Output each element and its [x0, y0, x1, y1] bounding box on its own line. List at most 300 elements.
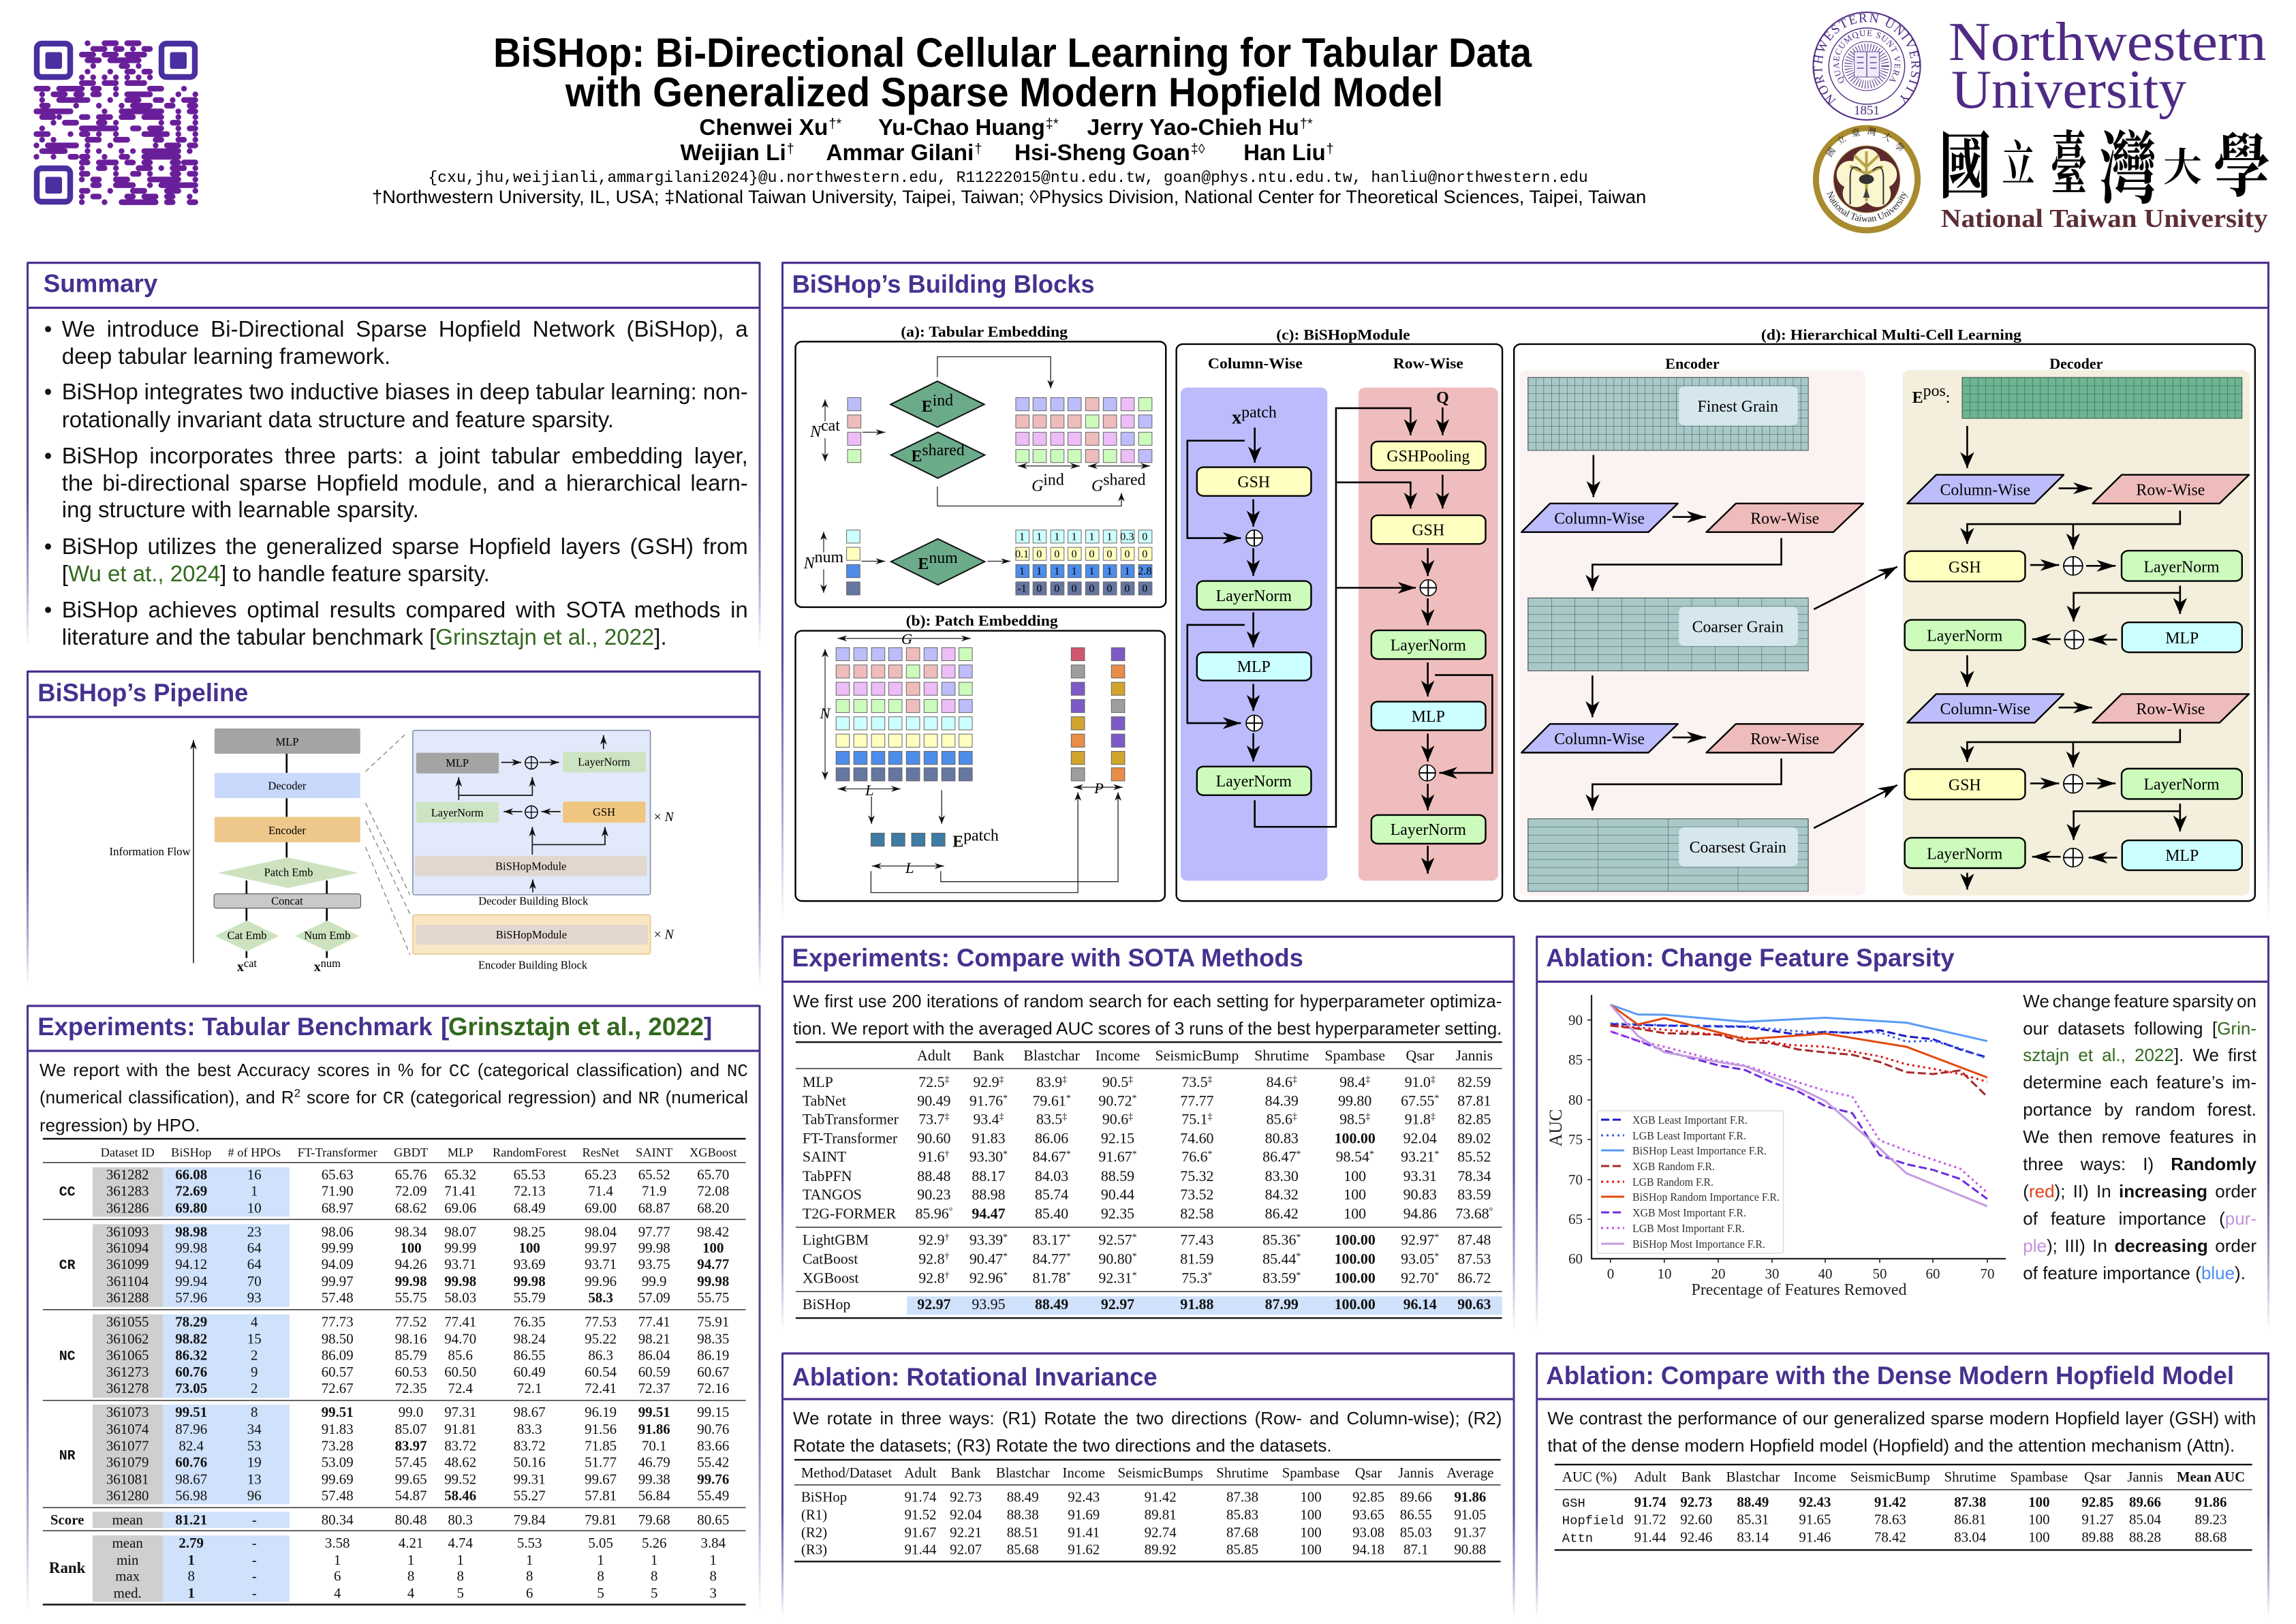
text block: sparsity explanation: We change feature sparsity on — [2023, 991, 2256, 1011]
panel: (d) hierarchical multi-cell learning: Finest Grain — [1698, 398, 1778, 416]
authors: † — [1327, 142, 1334, 157]
table: tabular benchmark: BiSHop — [171, 1146, 211, 1159]
text block: tabular benchmark intro: We report with the best Accuracy scores in % for CC (categorical classification) and NC — [40, 1060, 748, 1082]
logo: Northwestern seal: NORTHWESTERN UNIVERSITY — [1814, 14, 1920, 104]
table: tabular benchmark: 50.16 — [514, 1454, 546, 1471]
table: SOTA comparison: 98.4‡ — [1339, 1074, 1370, 1090]
table: SOTA comparison: 93.39* — [969, 1232, 1008, 1248]
table: SOTA comparison: 85.52 — [1457, 1148, 1491, 1165]
line chart: AUC vs features removed: 90 — [1568, 1012, 1583, 1028]
table: tabular benchmark: 71.85 — [585, 1438, 617, 1454]
panel: (a) tabular embedding: 0 — [1036, 583, 1042, 595]
panel: (a) tabular embedding: 0 — [1124, 583, 1130, 595]
pipeline diagram: Patch Emb — [264, 866, 313, 879]
authors: Hsi-Sheng Goan — [1014, 140, 1190, 165]
table: tabular benchmark: 64 — [247, 1256, 262, 1272]
authors: ‡◊ — [1191, 142, 1205, 157]
panel: (a) tabular embedding: Nnum — [803, 549, 844, 572]
table: tabular benchmark: 54.87 — [395, 1487, 427, 1503]
table: tabular benchmark: FT-Transformer — [298, 1146, 377, 1159]
table: SOTA comparison: 100 — [1344, 1168, 1366, 1184]
table: tabular benchmark: SAINT — [636, 1146, 672, 1159]
table: rotational invariance: 91.86 — [1454, 1489, 1486, 1505]
panel: (a) tabular embedding: 1 — [1036, 566, 1042, 577]
table: tabular benchmark: 83.97 — [395, 1438, 427, 1454]
logo: NTU calligraphy: 國 — [1939, 127, 1991, 208]
table: dense Hopfield comparison: 91.74 — [1634, 1494, 1666, 1510]
table: tabular benchmark: 72.41 — [585, 1380, 617, 1396]
text block: summary bullets — [44, 316, 748, 649]
table: SOTA comparison: 93.31 — [1403, 1168, 1437, 1184]
heading: SOTA: Experiments: Compare with SOTA Methods — [792, 944, 1303, 972]
figure: building blocks a b c — [796, 324, 1502, 901]
table: SOTA comparison: 91.0‡ — [1405, 1074, 1436, 1090]
table: rotational invariance: 100 — [1300, 1541, 1322, 1557]
table: tabular benchmark: 93 — [247, 1289, 262, 1306]
table: rotational invariance: 91.37 — [1454, 1524, 1486, 1540]
table: tabular benchmark: 361286 — [106, 1199, 149, 1216]
heading: summary: Summary — [44, 270, 158, 297]
table: SOTA comparison: 86.42 — [1265, 1206, 1299, 1222]
table: tabular benchmark: 46.79 — [638, 1454, 670, 1471]
table: SOTA comparison: 92.04 — [1403, 1130, 1437, 1146]
table: rotational invariance: 93.65 — [1352, 1507, 1384, 1523]
authors: †* — [828, 117, 841, 132]
table: SOTA comparison: 93.95 — [972, 1296, 1006, 1313]
panel: (a) tabular embedding: 0 — [1054, 583, 1059, 595]
panel: (a) tabular embedding: 0.3 — [1120, 532, 1134, 543]
table: dense Hopfield comparison: Jannis — [2127, 1469, 2163, 1485]
table: rotational invariance: 91.74 — [904, 1489, 937, 1505]
table: tabular benchmark: 94.77 — [697, 1256, 729, 1272]
pipeline diagram: Information Flow — [110, 845, 191, 858]
panel: (d) hierarchical multi-cell learning: LayerNorm — [2143, 558, 2220, 576]
table: SOTA comparison: 91.76* — [969, 1093, 1008, 1109]
table: tabular benchmark: 65.32 — [444, 1167, 476, 1183]
table: rotational invariance: 85.68 — [1007, 1541, 1039, 1557]
panel: building blocks frame — [781, 262, 2269, 920]
panel: (a) tabular embedding: 1 — [1036, 532, 1042, 543]
table: SOTA comparison: 82.59 — [1457, 1074, 1491, 1090]
table: dense Hopfield comparison: Adult — [1634, 1469, 1666, 1485]
panel: (d) hierarchical multi-cell learning: Encoder — [1665, 355, 1720, 372]
panel: (a) tabular embedding: 0 — [1106, 549, 1112, 560]
logo: NTU wordmark: National Taiwan University — [1941, 204, 2268, 233]
heading: tabular benchmark: Grinsztajn et al., 2022 — [448, 1013, 704, 1041]
table: tabular benchmark: 1 — [407, 1552, 414, 1568]
table: tabular benchmark: 361273 — [106, 1364, 149, 1380]
line chart: AUC vs features removed: 85 — [1568, 1052, 1583, 1068]
table: tabular benchmark: 23 — [247, 1223, 262, 1240]
table: rotational invariance: 86.55 — [1400, 1507, 1432, 1523]
table: SOTA comparison: 83.30 — [1265, 1168, 1299, 1184]
table: rotational invariance: (R1) — [801, 1507, 827, 1523]
table: tabular benchmark: 98.21 — [638, 1330, 670, 1347]
table: tabular benchmark: 98.42 — [697, 1223, 729, 1240]
table: SOTA comparison: 86.72 — [1457, 1270, 1491, 1286]
table: tabular benchmark: 361079 — [106, 1454, 149, 1471]
table: SOTA comparison: 73.7‡ — [918, 1112, 949, 1128]
table: rotational invariance: Blastchar — [996, 1465, 1050, 1481]
pipeline diagram: × N — [654, 928, 674, 943]
table: tabular benchmark: 94.12 — [175, 1256, 207, 1272]
table: tabular benchmark: 91.56 — [585, 1421, 617, 1437]
table: SOTA comparison: 82.85 — [1457, 1112, 1491, 1128]
table: tabular benchmark: 90.76 — [697, 1421, 729, 1437]
table: tabular benchmark: 99.98 — [638, 1240, 670, 1256]
table: tabular benchmark: # of HPOs — [228, 1146, 281, 1159]
text block: sparsity explanation: (red); II) In increasing order — [2023, 1181, 2256, 1201]
table: tabular benchmark: 361282 — [106, 1167, 149, 1183]
pipeline diagram: Encoder Building Block — [478, 959, 588, 972]
table: dense Hopfield comparison: 92.46 — [1680, 1529, 1712, 1546]
table: tabular benchmark: 94.26 — [395, 1256, 427, 1272]
table: tabular benchmark: 8 — [651, 1568, 657, 1584]
table: dense Hopfield comparison: 91.27 — [2081, 1512, 2113, 1528]
table: SOTA comparison: 74.60 — [1180, 1130, 1214, 1146]
table: tabular benchmark: - — [252, 1535, 257, 1551]
table: tabular benchmark: 85.79 — [395, 1347, 427, 1363]
table: tabular benchmark: 76.35 — [514, 1314, 546, 1330]
table: rotational invariance: Method/Dataset — [801, 1465, 892, 1481]
table: dense Hopfield comparison: Blastchar — [1726, 1469, 1780, 1485]
table: SOTA comparison: 92.15 — [1101, 1130, 1134, 1146]
table: rotational invariance: 87.68 — [1226, 1524, 1258, 1540]
table: dense Hopfield comparison: 91.42 — [1874, 1494, 1906, 1510]
table: tabular benchmark: 80.65 — [697, 1512, 729, 1528]
table: SOTA comparison: 92.35 — [1101, 1206, 1134, 1222]
table: dense Hopfield comparison: GSH — [1562, 1496, 1585, 1511]
title: with Generalized Sparse Modern Hopfield Model — [565, 70, 1443, 115]
table: dense Hopfield comparison: 88.49 — [1737, 1494, 1769, 1510]
chart legend: BiSHop Most Importance F.R. — [1632, 1238, 1765, 1251]
authors: ‡* — [1046, 117, 1059, 132]
table: tabular benchmark: 98.06 — [322, 1223, 354, 1240]
affiliations: †Northwestern University, IL, USA; ‡National Taiwan University, Taipei, Taiwan; ◊Physics Division, National Center for Theoretical Sciences, Taipei, Taiwan — [372, 187, 1646, 207]
panel: pipeline frame — [27, 671, 760, 986]
table: tabular benchmark: 99.51 — [638, 1404, 670, 1420]
table: tabular benchmark: 34 — [247, 1421, 262, 1437]
text block: SOTA intro: tion. We report with the averaged AUC scores of 3 runs of the best hyperparameter setting. — [793, 1018, 1502, 1039]
table: dense Hopfield comparison: Mean AUC — [2177, 1469, 2245, 1485]
panel: (d) hierarchical multi-cell learning: LayerNorm — [1927, 627, 2003, 645]
table: tabular benchmark: 361099 — [106, 1256, 149, 1272]
table: dense Hopfield comparison: 83.14 — [1737, 1529, 1769, 1546]
table: tabular benchmark: 99.51 — [322, 1404, 354, 1420]
table: rotational invariance: 92.85 — [1352, 1489, 1384, 1505]
panel: (a) tabular embedding: Gshared — [1091, 471, 1146, 495]
table: SOTA comparison: 85.96° — [915, 1206, 952, 1222]
table: rotational invariance: 100 — [1300, 1489, 1322, 1505]
table: SOTA comparison: 100.00 — [1335, 1251, 1376, 1268]
table: tabular benchmark: 1 — [456, 1552, 464, 1568]
table: SOTA comparison: 72.5‡ — [918, 1074, 949, 1090]
table: tabular benchmark: NC — [59, 1348, 76, 1364]
pipeline diagram: GSH — [593, 806, 615, 818]
table: dense Hopfield comparison: Shrutime — [1944, 1469, 1996, 1485]
table: tabular benchmark: 68.87 — [638, 1199, 670, 1216]
table: tabular benchmark: 8 — [251, 1404, 258, 1420]
table: tabular benchmark: 99.51 — [175, 1404, 207, 1420]
text block: sparsity explanation: our datasets following [Grin- — [2023, 1018, 2256, 1039]
university logos — [1812, 12, 2270, 233]
table: tabular benchmark: 55.42 — [697, 1454, 729, 1471]
table: tabular benchmark: 99.9 — [642, 1273, 666, 1289]
table: dense Hopfield comparison: 92.60 — [1680, 1512, 1712, 1528]
table: tabular benchmark: 87.96 — [175, 1421, 207, 1437]
table: tabular benchmark: 98.07 — [444, 1223, 476, 1240]
panel: (b) patch embedding: P — [1093, 780, 1104, 797]
table: tabular benchmark: 4.74 — [448, 1535, 474, 1551]
panel: (a) tabular embedding: Enum — [918, 549, 958, 573]
table: tabular benchmark: 361074 — [106, 1421, 149, 1437]
line chart: AUC vs features removed: 75 — [1568, 1131, 1583, 1148]
QR code — [36, 43, 196, 202]
pipeline diagram — [110, 729, 674, 975]
table: tabular benchmark: 3 — [710, 1585, 717, 1602]
text block: summary bullets: • — [44, 533, 52, 559]
panel: (a) tabular embedding: 1 — [1019, 532, 1025, 543]
table: rotational invariance: 92.43 — [1068, 1489, 1100, 1505]
panel: (d) hierarchical multi-cell learning: LayerNorm — [2143, 776, 2220, 794]
table: tabular benchmark: 65.53 — [514, 1167, 546, 1183]
table: rotational invariance: 88.38 — [1007, 1507, 1039, 1523]
table: SOTA comparison: 76.6* — [1181, 1148, 1213, 1165]
table: tabular benchmark: 83.66 — [697, 1438, 729, 1454]
panel: (b) patch embedding: L — [865, 782, 874, 799]
panel: (a) tabular embedding: 0 — [1142, 532, 1147, 543]
table: rotational invariance: 93.08 — [1352, 1524, 1384, 1540]
panel: (d) hierarchical multi-cell learning: LayerNorm — [1927, 846, 2003, 863]
table: tabular benchmark: 85.07 — [395, 1421, 427, 1437]
pipeline diagram: Concat — [271, 895, 303, 908]
panel: (c) BiSHopModule: MLP — [1237, 658, 1271, 676]
table: SOTA comparison: 98.54* — [1336, 1148, 1374, 1165]
poster header — [372, 30, 1646, 207]
panel: (a) tabular embedding: 1 — [1071, 532, 1077, 543]
table: SOTA comparison: 81.59 — [1180, 1251, 1214, 1268]
panel: (a) tabular embedding: 2.8 — [1138, 566, 1151, 577]
chart legend: XGB Random F.R. — [1632, 1160, 1715, 1173]
table: SOTA comparison: FT-Transformer — [803, 1130, 898, 1146]
table: tabular benchmark: 96.19 — [585, 1404, 617, 1420]
table: tabular benchmark: 2.79 — [179, 1535, 204, 1551]
table: tabular benchmark: 8 — [526, 1568, 533, 1584]
pipeline diagram: MLP — [446, 756, 469, 769]
text block: rotational intro — [793, 1408, 1502, 1456]
table: rotational invariance: Income — [1062, 1465, 1105, 1481]
table: SOTA comparison: 93.4‡ — [973, 1112, 1004, 1128]
table: tabular benchmark: 99.97 — [322, 1273, 354, 1289]
table: tabular benchmark: 86.3 — [588, 1347, 613, 1363]
heading: sparsity: Ablation: Change Feature Sparsity — [1546, 944, 1955, 972]
table: tabular benchmark: 55.79 — [514, 1289, 546, 1306]
table: tabular benchmark: 55.27 — [514, 1487, 546, 1503]
table: SOTA comparison: LightGBM — [803, 1232, 869, 1248]
table: tabular benchmark: 99.98 — [697, 1273, 729, 1289]
panel: feature sparsity frame — [1536, 936, 2269, 1331]
table: SOTA comparison: 88.48 — [917, 1168, 951, 1184]
pipeline diagram: LayerNorm — [578, 756, 630, 769]
heading: pipeline: BiSHop’s Pipeline — [37, 679, 248, 707]
table: tabular benchmark: 69.06 — [444, 1199, 476, 1216]
table: SOTA comparison: 90.72* — [1098, 1093, 1137, 1109]
panel: summary frame — [27, 262, 760, 647]
table: dense Hopfield comparison: Hopfield — [1562, 1514, 1624, 1529]
table: tabular benchmark: 1 — [597, 1552, 604, 1568]
panel: (c) BiSHopModule: LayerNorm — [1216, 773, 1292, 791]
table: SOTA comparison: 100.00 — [1335, 1130, 1376, 1146]
table: SOTA comparison: 75.32 — [1180, 1168, 1213, 1184]
table: rotational invariance: 87.38 — [1226, 1489, 1258, 1505]
table: SOTA comparison: 77.77 — [1180, 1093, 1214, 1109]
table: tabular benchmark: 91.86 — [638, 1421, 670, 1437]
logo: National Taiwan University seal — [1812, 125, 1921, 233]
text block: SOTA intro — [793, 991, 1502, 1039]
table: SOTA comparison: 90.23 — [917, 1186, 951, 1203]
table: SOTA comparison: 90.60 — [917, 1130, 951, 1146]
table: rotational invariance: 88.51 — [1007, 1524, 1039, 1540]
table: tabular benchmark: 99.98 — [514, 1273, 546, 1289]
table: SOTA comparison: 73.68° — [1455, 1206, 1493, 1222]
table: rotational invariance: 91.41 — [1068, 1524, 1100, 1540]
panel: (d) hierarchical multi-cell learning: Row-Wise — [2136, 481, 2205, 499]
chart legend: LGB Least Important F.R. — [1632, 1129, 1746, 1142]
table: tabular benchmark: 98.16 — [395, 1330, 427, 1347]
table: SOTA comparison: Blastchar — [1023, 1047, 1081, 1064]
table: tabular benchmark: 99.99 — [322, 1240, 354, 1256]
table: tabular benchmark — [43, 1139, 746, 1605]
table: rotational invariance: Spambase — [1282, 1465, 1339, 1481]
line chart: AUC vs features removed: 40 — [1818, 1266, 1833, 1282]
table: tabular benchmark: 81.21 — [175, 1512, 207, 1528]
table: tabular benchmark: 53 — [247, 1438, 262, 1454]
panel: (d) hierarchical multi-cell learning: MLP — [2165, 630, 2199, 647]
table: SOTA comparison: T2G-FORMER — [803, 1206, 897, 1222]
table: tabular benchmark: 99.0 — [399, 1404, 423, 1420]
chart legend: LGB Most Important F.R. — [1632, 1222, 1745, 1235]
table: SOTA comparison: TabTransformer — [803, 1112, 899, 1128]
text block: sparsity explanation: sztajn et al., 2022]. We first — [2023, 1045, 2256, 1065]
table: SOTA comparison: 100 — [1344, 1206, 1366, 1222]
table: SOTA comparison: 87.99 — [1265, 1296, 1299, 1313]
table: tabular benchmark: 19 — [247, 1454, 262, 1471]
logo: National Taiwan University seal: 國立臺灣大學 — [1825, 127, 1905, 157]
table: tabular benchmark: 98.34 — [395, 1223, 427, 1240]
panel: SOTA frame — [781, 936, 1515, 1331]
table: SOTA comparison: 92.70* — [1401, 1270, 1439, 1286]
table: tabular benchmark: - — [252, 1585, 257, 1602]
panel: dense Hopfield frame — [1536, 1353, 2269, 1617]
authors: Jerry Yao-Chieh Hu — [1087, 114, 1299, 140]
panel: (a) tabular embedding: 0 — [1036, 549, 1042, 560]
table: tabular benchmark: 73.05 — [175, 1380, 207, 1396]
table: dense Hopfield comparison: Attn — [1562, 1531, 1593, 1546]
table: tabular benchmark: 55.75 — [697, 1289, 729, 1306]
title — [493, 30, 1532, 115]
panel: (d) hierarchical multi-cell learning: Column-Wise — [1554, 731, 1645, 748]
table: tabular benchmark: 80.34 — [322, 1512, 354, 1528]
pipeline diagram: xnum — [314, 957, 341, 975]
table: SOTA comparison: 93.05* — [1401, 1251, 1439, 1268]
authors: Weijian Li — [681, 140, 786, 165]
panel: tabular benchmark frame — [27, 1005, 760, 1614]
panel: (a) tabular embedding: 0 — [1124, 549, 1130, 560]
table: SOTA comparison: 91.8‡ — [1405, 1112, 1436, 1128]
table: tabular benchmark: 79.68 — [638, 1512, 670, 1528]
panel: (c) BiSHopModule: Q — [1436, 389, 1449, 407]
text block: sparsity explanation: ple); III) In decreasing order — [2023, 1236, 2256, 1256]
table: tabular benchmark: 72.08 — [697, 1183, 729, 1199]
table: tabular benchmark: 60.76 — [175, 1454, 207, 1471]
authors: †* — [1300, 117, 1313, 132]
table: SOTA comparison: TabNet — [803, 1093, 846, 1109]
table: tabular benchmark: 4 — [407, 1585, 415, 1602]
text block: summary bullets: BiSHop incorporates three parts: a joint tabular embedding layer, — [62, 443, 748, 468]
table: dense Hopfield comparison: SeismicBump — [1850, 1469, 1930, 1485]
table: tabular benchmark: med. — [114, 1585, 142, 1602]
table: dense Hopfield comparison: 85.04 — [2129, 1512, 2162, 1528]
text block: summary bullets: BiSHop utilizes the generalized sparse Hopfield layers (GSH) from — [62, 533, 748, 559]
table: tabular benchmark: 4.21 — [399, 1535, 423, 1551]
table: SOTA comparison: 75.1‡ — [1181, 1112, 1213, 1128]
table: tabular benchmark: 72.67 — [322, 1380, 354, 1396]
table: SOTA comparison: MLP — [803, 1074, 833, 1090]
panel: (c) BiSHopModule: MLP — [1412, 708, 1445, 726]
table: SOTA comparison: 91.6† — [918, 1148, 949, 1165]
authors: Chenwei Xu — [699, 114, 828, 140]
table: tabular benchmark: 65.63 — [322, 1167, 354, 1183]
table: tabular benchmark: 93.71 — [585, 1256, 617, 1272]
table: SOTA comparison: 90.80* — [1098, 1251, 1137, 1268]
text block: summary bullets: • — [44, 597, 52, 622]
table: tabular benchmark: 60.57 — [322, 1364, 354, 1380]
table: SOTA comparison: 91.83 — [972, 1130, 1006, 1146]
panel: (d) hierarchical multi-cell learning — [1514, 326, 2255, 901]
table: rotational invariance: 89.92 — [1145, 1541, 1177, 1557]
panel: (a) tabular embedding: 1 — [1089, 566, 1094, 577]
table: tabular benchmark: ResNet — [583, 1146, 619, 1159]
heading: dense: Ablation: Compare with the Dense Modern Hopfield Model — [1546, 1362, 2234, 1390]
table: tabular benchmark: 60.54 — [585, 1364, 617, 1380]
table: tabular benchmark: 60.59 — [638, 1364, 670, 1380]
panel: (d) hierarchical multi-cell learning: Column-Wise — [1554, 510, 1645, 527]
table: tabular benchmark: 48.62 — [444, 1454, 476, 1471]
table: tabular benchmark: 1 — [651, 1552, 657, 1568]
table: SOTA comparison: 83.5‡ — [1036, 1112, 1067, 1128]
table: tabular benchmark: 99.99 — [444, 1240, 476, 1256]
table: tabular benchmark: 58.03 — [444, 1289, 476, 1306]
panel: (a) tabular embedding: 0 — [1106, 583, 1112, 595]
table: SOTA comparison: Qsar — [1406, 1047, 1435, 1064]
table: SOTA comparison: 85.74 — [1035, 1186, 1068, 1203]
panel: (b) patch embedding: (b): Patch Embedding — [906, 613, 1058, 629]
table: tabular benchmark: RandomForest — [493, 1146, 566, 1159]
table: dense Hopfield comparison: 83.04 — [1954, 1529, 1987, 1546]
table: tabular benchmark: 72.1 — [517, 1380, 542, 1396]
table: tabular benchmark: 86.55 — [514, 1347, 546, 1363]
table: rotational invariance: Average — [1446, 1465, 1493, 1481]
table: tabular benchmark: 77.52 — [395, 1314, 427, 1330]
line chart: AUC vs features removed: 50 — [1872, 1266, 1887, 1282]
pipeline diagram: xcat — [237, 957, 257, 975]
table: SOTA comparison: 90.6‡ — [1102, 1112, 1133, 1128]
table: tabular benchmark: 99.98 — [395, 1273, 427, 1289]
text block: summary bullets: • — [44, 443, 52, 468]
table: dense Hopfield comparison — [1555, 1465, 2252, 1550]
table: tabular benchmark: 99.98 — [444, 1273, 476, 1289]
table: SOTA comparison: 73.52 — [1180, 1186, 1213, 1203]
